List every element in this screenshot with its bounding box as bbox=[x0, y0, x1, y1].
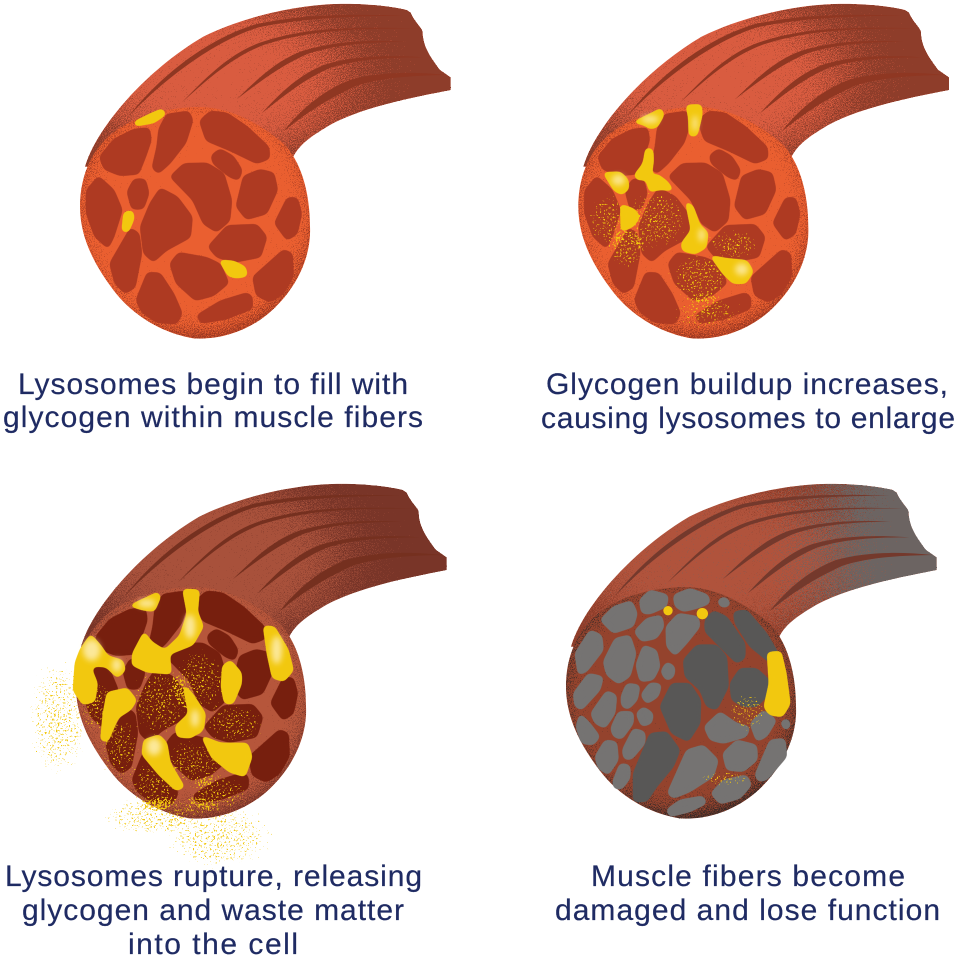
glycogen speckles inside the fiber bbox=[78, 647, 265, 820]
caption: stage 4: damaged and lose function bbox=[555, 894, 940, 927]
panel: stage 4, fibers damaged bbox=[555, 484, 940, 927]
muscle fiber illustration, stage 4 bbox=[566, 484, 937, 819]
pale highlights bbox=[83, 599, 282, 755]
caption: stage 4: Muscle fibers become bbox=[591, 860, 905, 893]
muscle fiber illustration, stage 1 bbox=[80, 4, 451, 339]
glycogen speckles, stage 4 bbox=[695, 692, 770, 786]
caption: stage 4 bbox=[555, 860, 940, 927]
panel: stage 1, lysosomes begin to fill bbox=[3, 4, 451, 434]
lysosomes: small glycogen deposits bbox=[121, 108, 248, 279]
caption: stage 1: glycogen within muscle fibers bbox=[3, 401, 423, 434]
caption: stage 3 bbox=[5, 860, 422, 958]
caption: stage 1: Lysosomes begin to fill with bbox=[18, 368, 408, 401]
caption: stage 3: glycogen and waste matter bbox=[22, 894, 404, 927]
lysosomes: enlarging glycogen deposits bbox=[602, 104, 754, 284]
grey damaged cells bbox=[573, 588, 791, 817]
caption: stage 2: Glycogen buildup increases, bbox=[546, 368, 948, 401]
caption: stage 3: Lysosomes rupture, releasing bbox=[5, 860, 422, 893]
panel: stage 2, glycogen buildup increases bbox=[541, 4, 955, 435]
glycogen deposits, stage 4 bbox=[663, 606, 791, 717]
caption: stage 1 bbox=[3, 368, 423, 434]
pale highlights bbox=[612, 115, 748, 275]
glycogen speckles, stage 2 bbox=[587, 187, 762, 330]
lysosomes: ruptured glycogen deposits bbox=[73, 589, 294, 791]
muscle fiber illustration, stage 3 bbox=[76, 484, 447, 819]
caption: stage 2 bbox=[541, 368, 955, 435]
caption: stage 2: causing lysosomes to enlarge bbox=[541, 402, 955, 435]
panel: stage 3, lysosomes rupture bbox=[5, 484, 447, 958]
glycogen speckles outside the fiber bbox=[27, 655, 277, 873]
muscle fiber illustration, stage 2 bbox=[578, 4, 949, 339]
